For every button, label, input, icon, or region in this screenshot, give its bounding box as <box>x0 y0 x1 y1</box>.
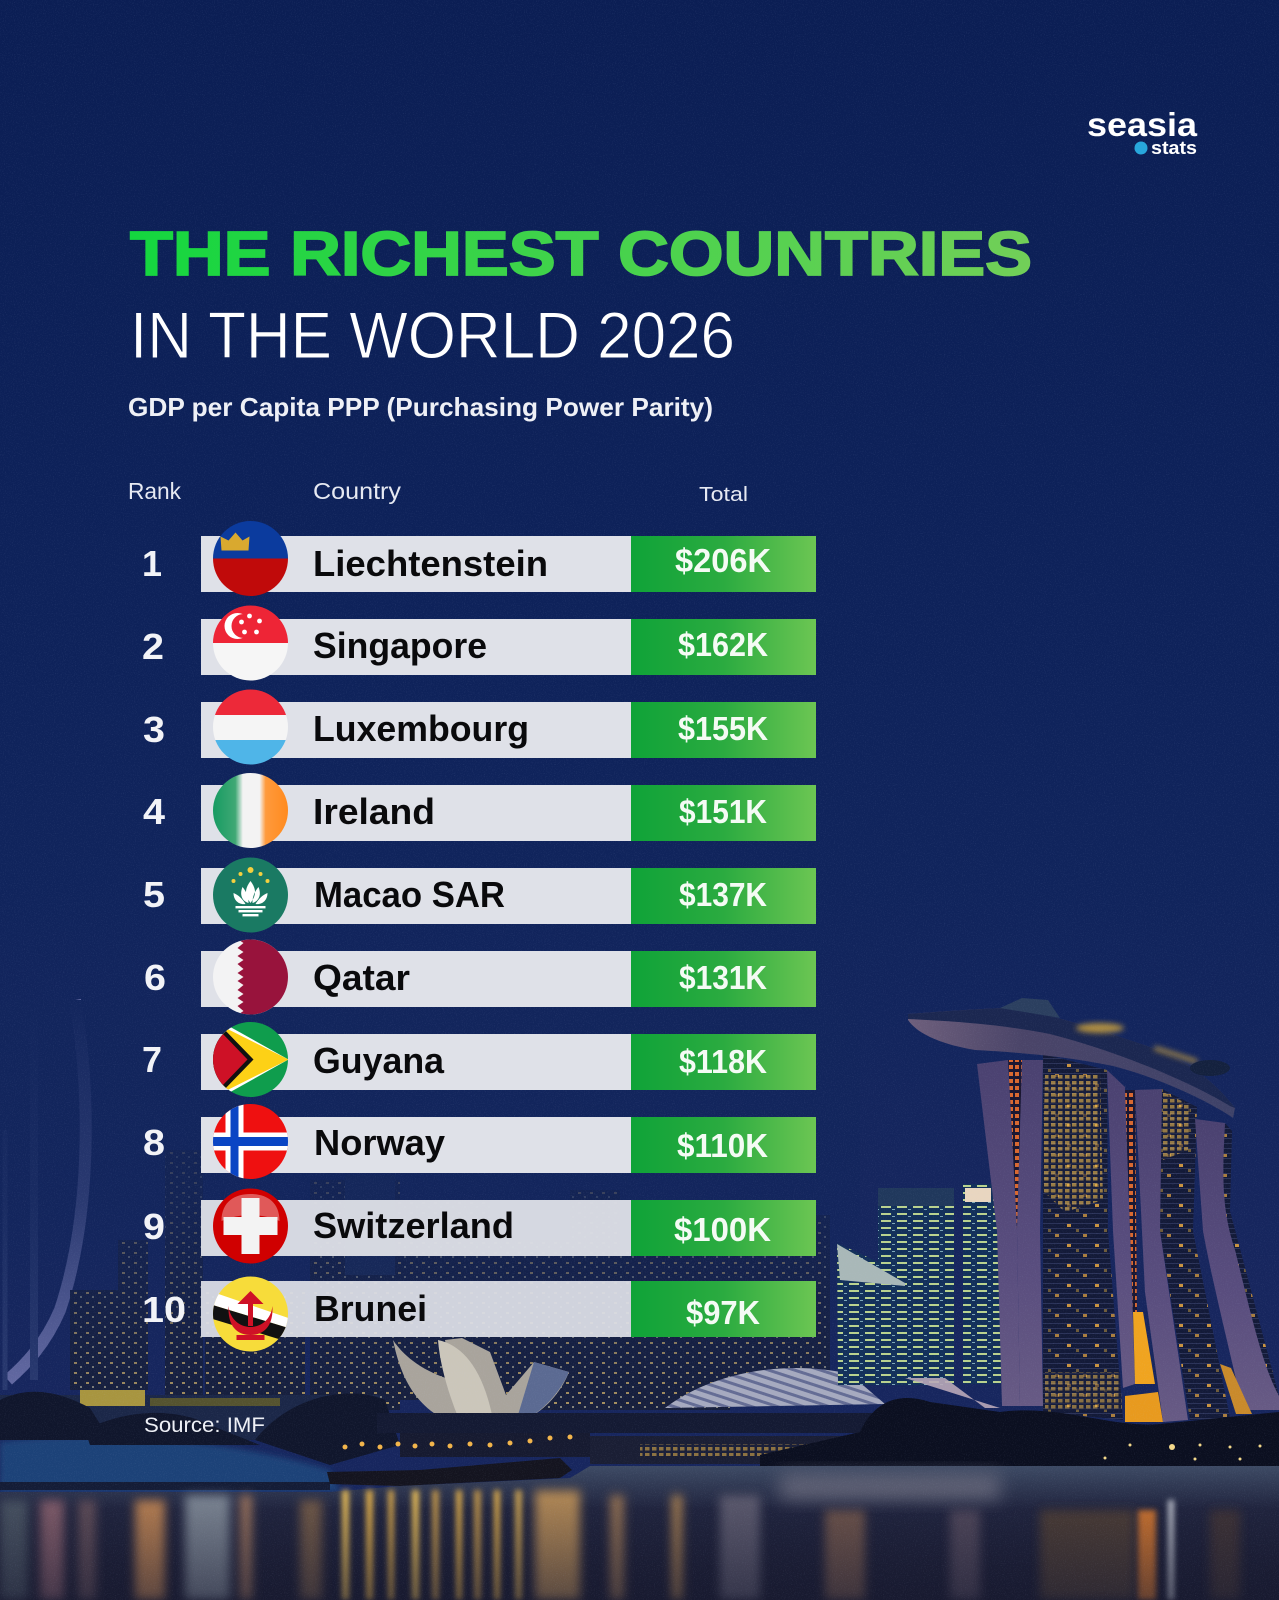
value: $131K <box>679 959 767 996</box>
tower 1 right wall <box>1017 1060 1043 1406</box>
row 7: Guyana <box>142 1022 816 1098</box>
street lights <box>342 1434 572 1450</box>
fade overlay on left city <box>0 1000 860 1410</box>
tower 2 lit pattern <box>1163 1092 1190 1160</box>
flag: Brunei <box>212 1276 288 1352</box>
glass office towers <box>837 1184 1001 1385</box>
country name: Guyana <box>313 1040 445 1081</box>
pavilion roof <box>905 1378 1000 1408</box>
sky park deck top <box>908 1008 1235 1108</box>
tower 1 left wall <box>977 1060 1020 1406</box>
value: $162K <box>678 626 768 663</box>
value bar <box>631 1034 816 1090</box>
rank: 8 <box>143 1122 165 1163</box>
rank: 9 <box>143 1206 165 1247</box>
rank: 4 <box>143 791 165 832</box>
row 4: Ireland <box>143 772 816 848</box>
water darkening <box>0 1500 1279 1600</box>
country name: Qatar <box>313 957 410 998</box>
value: $151K <box>679 793 767 830</box>
country name: Brunei <box>314 1288 427 1329</box>
marina bay sands hotel <box>908 998 1279 1422</box>
tower 1 lit pattern <box>1042 1075 1103 1212</box>
flag: Norway <box>212 1104 288 1180</box>
country name: Singapore <box>313 625 487 666</box>
water <box>0 1466 1279 1600</box>
logo <box>1087 106 1198 158</box>
rank: 7 <box>142 1039 162 1080</box>
jetty <box>327 1458 572 1486</box>
source note: Source: IMF <box>144 1414 265 1437</box>
value bar <box>631 1281 816 1337</box>
rank: 2 <box>142 626 164 667</box>
dome <box>665 1368 885 1408</box>
row 3: Luxembourg <box>143 689 816 765</box>
row 1: Liechtenstein <box>142 520 816 596</box>
logo wordmark: seasia <box>1087 106 1198 143</box>
tower 2 windows <box>1160 1089 1230 1420</box>
value bar <box>631 951 816 1007</box>
flag: Luxembourg <box>212 689 288 765</box>
column header: country: Country <box>313 478 402 504</box>
value bar <box>631 1200 816 1256</box>
logo sub word: stats <box>1151 138 1197 158</box>
orange atrium <box>1133 1312 1155 1384</box>
country name: Liechtenstein <box>313 543 548 584</box>
value: $155K <box>678 710 768 747</box>
value: $137K <box>679 876 767 913</box>
flag: Guyana <box>212 1022 288 1098</box>
tower 2 wall A <box>1107 1070 1135 1388</box>
row 6: Qatar <box>144 939 816 1015</box>
water gold reflections <box>342 1490 1174 1600</box>
tower 2 slit <box>1125 1090 1137 1312</box>
tower 3 wall <box>1195 1119 1279 1410</box>
left shoreline <box>0 1390 400 1492</box>
value: $110K <box>677 1127 768 1164</box>
value: $118K <box>679 1043 767 1080</box>
value: $97K <box>686 1294 760 1331</box>
tower 1 base lights <box>1045 1372 1122 1410</box>
subtitle: GDP per Capita PPP (Purchasing Power Parity) <box>128 392 713 422</box>
value bar <box>631 785 816 841</box>
tree line <box>760 1398 1279 1470</box>
flag: Liechtenstein <box>212 520 288 596</box>
row 2: Singapore <box>142 605 816 681</box>
column header: total: Total <box>699 484 748 506</box>
tower 2 wall B <box>1135 1089 1188 1422</box>
row 9: Switzerland <box>143 1188 816 1264</box>
value bar <box>631 868 816 924</box>
tower 1 slit <box>1008 1060 1022 1231</box>
value: $100K <box>674 1211 771 1248</box>
rank: 5 <box>143 874 165 915</box>
sky park gardens <box>1076 1023 1198 1064</box>
flag: Singapore <box>212 605 288 681</box>
rank: 1 <box>142 543 162 584</box>
art science museum <box>393 1338 569 1417</box>
value bar <box>631 536 816 592</box>
flag: Switzerland <box>212 1188 288 1264</box>
shore lights <box>1104 1444 1262 1460</box>
title line 2: IN THE WORLD 2026 <box>130 298 735 372</box>
rank: 3 <box>143 709 165 750</box>
country name: Luxembourg <box>313 708 529 749</box>
flag: Macao <box>212 857 288 933</box>
country name: Ireland <box>313 791 435 832</box>
sky park deck underside <box>908 1008 1235 1118</box>
value bar <box>631 702 816 758</box>
row 5: Macao SAR <box>143 857 816 933</box>
country name: Switzerland <box>313 1205 514 1246</box>
tower 1 windows <box>1043 1054 1123 1420</box>
water reflections <box>0 1490 1240 1600</box>
country name: Norway <box>314 1122 445 1163</box>
column header: rank: Rank <box>128 478 181 504</box>
tower 3 orange lights <box>1220 1364 1252 1414</box>
ferris wheel <box>5 1000 86 1390</box>
row 8: Norway <box>143 1104 816 1180</box>
value bar <box>631 1117 816 1173</box>
orange base <box>1125 1392 1163 1422</box>
bridge <box>327 1413 880 1486</box>
value bar <box>631 619 816 675</box>
value: $206K <box>675 542 771 579</box>
rank: 10 <box>142 1289 186 1330</box>
sky park rooftop <box>1000 998 1060 1018</box>
skyline: left side faded city <box>5 1000 830 1410</box>
row 10: Brunei <box>142 1276 816 1352</box>
water grey glow <box>780 1474 1000 1500</box>
flag: Qatar <box>212 939 288 1015</box>
logo globe dot <box>1134 142 1148 154</box>
flag: Ireland <box>212 772 288 848</box>
rank: 6 <box>144 957 166 998</box>
country name: Macao SAR <box>314 874 505 915</box>
tower 3 windows <box>1212 1123 1279 1410</box>
title line 1: THE RICHEST COUNTRIES <box>130 220 1032 289</box>
